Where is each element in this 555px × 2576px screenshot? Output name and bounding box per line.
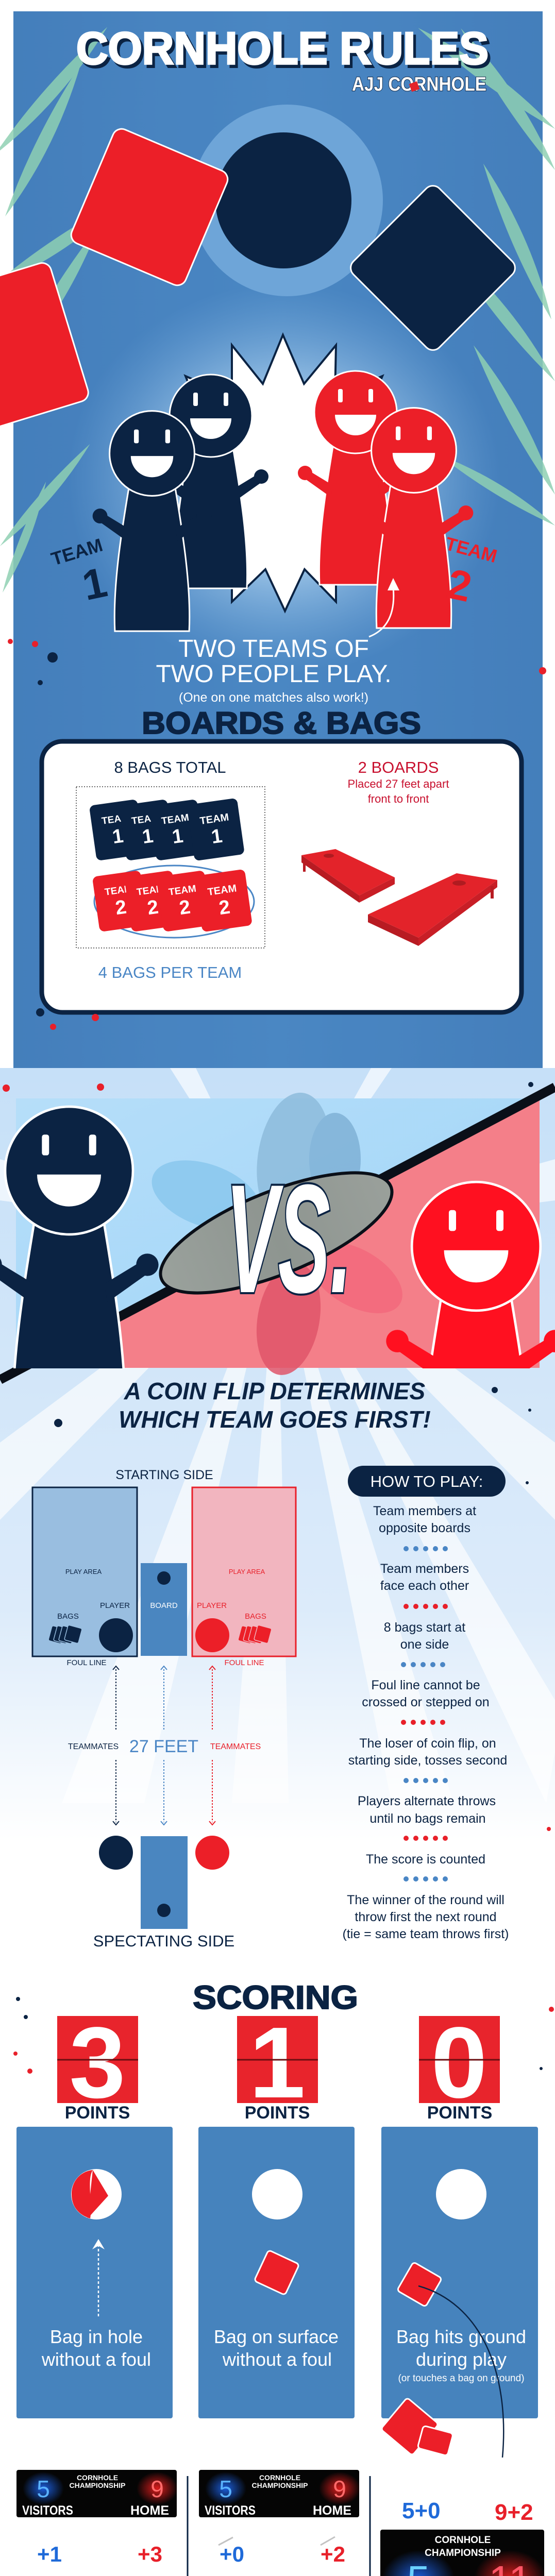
scoreboard step 3: difference added: CHAMPIONSHIP	[425, 2548, 501, 2558]
scoreboard step 2: point difference: VISITORS	[205, 2503, 256, 2518]
decorative petals	[142, 1088, 414, 1380]
rules list: 8 bags start at	[384, 1620, 465, 1635]
rules list: crossed or stepped on	[362, 1695, 490, 1709]
scoreboard step 2: point difference: HOME	[313, 2503, 351, 2518]
scoreboard step 2: point difference: +2	[321, 2542, 345, 2566]
rules list: Foul line cannot be	[371, 1678, 480, 1692]
diagram: court layout	[32, 1468, 296, 1950]
team 2 play area: PLAY AREA	[229, 1568, 265, 1575]
heading pill	[348, 1466, 506, 1497]
confetti dots	[3, 639, 554, 2576]
bags illustration: TEAM	[101, 812, 130, 827]
scoring: 0 points: 0	[431, 2006, 487, 2119]
bags illustration: TEAM	[131, 812, 160, 827]
board	[141, 1563, 187, 1656]
label: team 2: TEAM	[443, 533, 499, 567]
panel: intro board	[0, 11, 555, 1068]
text: two teams: TWO PEOPLE PLAY.	[156, 660, 392, 688]
starburst	[155, 335, 412, 611]
logo: AJJ Cornhole: AJJ CORNHOLE	[352, 74, 486, 95]
rules list: Team members at	[373, 1504, 476, 1518]
labels: teammates and 27 feet: TEAMMATES	[68, 1742, 119, 1751]
rules list: Players alternate throws	[358, 1794, 496, 1808]
scoring: 1 point: POINTS	[245, 2103, 310, 2123]
rules list: face each other	[380, 1579, 469, 1593]
scoreboard step 1: points tallied: +1	[37, 2542, 62, 2566]
icon: coin	[146, 1148, 406, 1317]
bags illustration	[76, 787, 265, 948]
board: BOARD	[150, 1601, 178, 1610]
diagram: court layout: TEAMMATES	[210, 1742, 261, 1751]
scoreboard step 2: point difference: CORNHOLE	[259, 2473, 300, 2482]
scoreboard step 1: points tallied	[16, 2470, 178, 2576]
icon: navy bag	[347, 182, 519, 354]
scoring: 3 points	[16, 2006, 173, 2418]
diagram: court layout: 27 FEET	[129, 1737, 198, 1756]
panel: boards and bags box	[42, 741, 522, 1012]
scoring: 1 point: without a foul	[222, 2349, 332, 2370]
scoring: 3 points: without a foul	[41, 2349, 151, 2370]
label: team 1: TEAM	[48, 534, 105, 570]
scoreboard step 2: point difference: 9	[333, 2476, 346, 2502]
scoring: 0 points: POINTS	[427, 2103, 492, 2123]
background: sunburst	[0, 1068, 555, 1841]
team 2 play area: BAGS	[245, 1612, 266, 1621]
text: two teams: TWO TEAMS OF	[178, 635, 369, 663]
scoring: 3 points: Bag in hole	[50, 2326, 143, 2347]
panel: versus	[0, 1083, 555, 1384]
characters: navy and red	[0, 1106, 555, 1368]
scoreboard step 1: points tallied: +3	[138, 2542, 162, 2566]
rules list: opposite boards	[379, 1521, 470, 1535]
scoring: 0 points: during play	[416, 2349, 507, 2370]
label: spectating side: SPECTATING SIDE	[93, 1932, 234, 1950]
arrows: distance	[116, 1669, 212, 1822]
text: 2 boards: Placed 27 feet apart	[348, 777, 449, 790]
bags illustration: 1	[210, 825, 224, 848]
foul lines: FOUL LINE	[67, 1658, 106, 1667]
scoreboard step 3: difference added: 9+2	[495, 2500, 533, 2525]
diagonal divider	[0, 1087, 555, 1380]
scoreboard step 1: points tallied: VISITORS	[22, 2503, 73, 2518]
rules list: The score is counted	[366, 1852, 485, 1867]
scoreboard step 3: difference added	[380, 2498, 546, 2576]
heading: scoring: SCORING	[193, 1979, 358, 2016]
divider lines	[188, 2476, 370, 2576]
bags illustration: TEAM	[136, 884, 165, 898]
bags illustration: TEAM	[207, 883, 238, 898]
scoreboard step 2: point difference: +0	[220, 2542, 244, 2566]
team 1 play area: BAGS	[57, 1612, 79, 1621]
team 1 play area: PLAY AREA	[65, 1568, 102, 1575]
text: 2 boards: 2 BOARDS	[358, 758, 439, 776]
rules list: (tie = same team throws first)	[342, 1927, 509, 1941]
scoreboard step 3: difference added: 5+0	[402, 2498, 441, 2523]
text: 8 bags total: 8 BAGS TOTAL	[114, 758, 226, 776]
scoring: 0 points: Bag hits ground	[396, 2326, 526, 2347]
scoring: 3 points: 3	[69, 2006, 126, 2119]
title: CORNHOLE RULES	[76, 23, 489, 74]
bags illustration: 2	[114, 896, 128, 919]
label: team 1: 1	[78, 559, 111, 609]
scoring: 1 point	[198, 2006, 355, 2418]
title: CORNHOLE RULES	[79, 26, 491, 77]
scoring: 3 points: POINTS	[65, 2103, 130, 2123]
rules list: The loser of coin flip, on	[359, 1736, 496, 1751]
label: team 2: 2	[443, 561, 476, 611]
text: VS: VS.	[226, 1152, 352, 1325]
scoring: 0 points	[381, 2006, 538, 2458]
scoreboard step 2: point difference: 5	[219, 2476, 232, 2502]
heading: boards & bags: BOARDS & BAGS	[142, 706, 421, 740]
heading: coin flip: WHICH TEAM GOES FIRST!	[119, 1406, 431, 1433]
scoring: 0 points: (or touches a bag on ground)	[398, 2373, 525, 2384]
team 1 play area: PLAYER	[100, 1601, 130, 1610]
scoreboard step 2: point difference: CHAMPIONSHIP	[252, 2481, 308, 2489]
bags illustration: 2	[217, 896, 231, 919]
rules list: Team members	[380, 1562, 469, 1576]
text: two teams	[156, 635, 392, 705]
rules list: The winner of the round will	[347, 1893, 504, 1907]
team 2 play area: PLAYER	[197, 1601, 227, 1610]
label: starting side: STARTING SIDE	[115, 1468, 213, 1482]
icon: red bag left	[0, 261, 91, 438]
scoreboard step 1: points tallied: 9	[150, 2476, 164, 2502]
heading: coin flip	[119, 1378, 431, 1433]
bags illustration: 1	[111, 825, 125, 848]
scoreboard step 3: difference added: CORNHOLE	[435, 2535, 491, 2546]
bags illustration: TEAM	[168, 884, 197, 898]
text: 2 boards: front to front	[368, 792, 429, 805]
scoreboard step 2: point difference	[199, 2470, 360, 2576]
rules list: starting side, tosses second	[348, 1753, 507, 1768]
text: 4 bags per team: 4 BAGS PER TEAM	[98, 963, 242, 981]
arrow: to team 2	[369, 578, 399, 637]
panel: how to play	[342, 1466, 509, 1941]
bags illustration: 1	[171, 825, 184, 848]
leaves decoration	[0, 22, 555, 595]
text: 2 boards	[348, 758, 449, 805]
bags illustration: 1	[141, 825, 155, 848]
bags illustration: TEAM	[199, 811, 230, 827]
rules list: throw first the next round	[355, 1910, 497, 1924]
label: team 1	[48, 534, 111, 609]
heading pill: HOW TO PLAY:	[371, 1472, 483, 1490]
bags illustration: 2	[146, 896, 160, 919]
scoreboard step 1: points tallied: 5	[37, 2476, 50, 2502]
scoring: 1 point: Bag on surface	[214, 2326, 339, 2347]
rules list: one side	[400, 1637, 449, 1652]
scoreboard step 1: points tallied: HOME	[130, 2503, 169, 2518]
spectating side board	[99, 1836, 229, 1929]
scoreboard step 1: points tallied: CORNHOLE	[77, 2473, 118, 2482]
rules list	[342, 1504, 509, 1941]
team 1 play area	[32, 1487, 137, 1656]
bags illustration: TEAM	[161, 812, 190, 827]
diagram: court layout: FOUL LINE	[225, 1658, 264, 1667]
scoreboard step 1: points tallied: CHAMPIONSHIP	[70, 2481, 125, 2489]
rules list: until no bags remain	[369, 1811, 486, 1826]
text: two teams: (One on one matches also work!)	[179, 690, 368, 705]
icon: board hole	[191, 105, 383, 296]
icon: red bag	[69, 126, 230, 288]
bags illustration: 2	[178, 896, 192, 919]
icon: two boards	[301, 849, 497, 946]
team 2 play area	[192, 1487, 296, 1656]
bags illustration: TEAM	[104, 884, 133, 898]
heading: coin flip: A COIN FLIP DETERMINES	[124, 1378, 426, 1404]
characters: team 1 and team 2	[93, 371, 473, 631]
scoring: 1 point: 1	[249, 2006, 306, 2119]
label: team 2	[443, 533, 499, 611]
